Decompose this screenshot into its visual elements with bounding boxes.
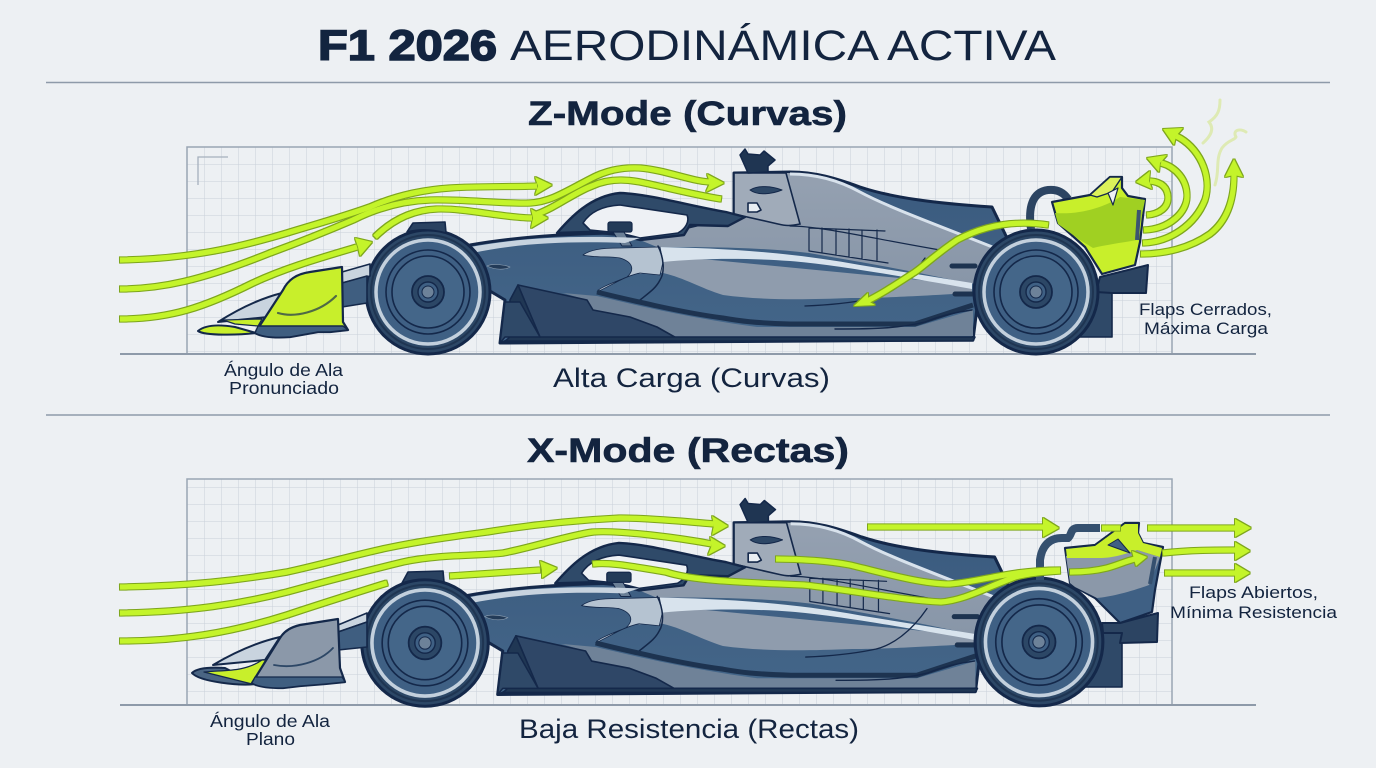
nose (213, 637, 280, 665)
flow to airbox (537, 180, 721, 214)
beam wing (1102, 613, 1158, 643)
title (318, 22, 1056, 70)
upper flow (120, 177, 552, 260)
title: F1 2026 (318, 22, 497, 70)
caption: Alta Carga: Alta Carga (Curvas) (553, 363, 830, 393)
label: front wing Z (224, 360, 343, 398)
heading: X-Mode: X-Mode (Rectas) (527, 432, 849, 470)
label: front wing X: Ángulo de Ala (210, 711, 330, 731)
rear wing outflow 4 (1141, 159, 1243, 254)
airflow arrows: Z-Mode (120, 128, 1243, 319)
lower flow (120, 238, 372, 319)
label: front wing Z: Ángulo de Ala (224, 360, 343, 380)
title: AERODINÁMICA ACTIVA (510, 22, 1056, 70)
rear wing outflow 3 (1143, 128, 1207, 243)
label: front wing X (210, 711, 330, 749)
rear wing, lime (1052, 177, 1145, 274)
front wing endplate, lime (255, 267, 348, 337)
label: rear wing Z: Máxima Carga (1144, 319, 1269, 338)
front wheel fender (407, 222, 446, 233)
heading: Z-Mode: Z-Mode (Curvas) (528, 95, 847, 133)
flow through wing slot (1102, 525, 1120, 531)
lime open flap (1066, 524, 1162, 558)
rear wheel (975, 578, 1103, 706)
wind tunnel grid (120, 147, 1256, 354)
front wing endplate, grey (252, 619, 345, 688)
rear wing main plane (1065, 523, 1163, 623)
turbulent wisps (1203, 100, 1246, 185)
panel: Z-Mode car diagram (120, 100, 1256, 354)
label: rear wing X: Mínima Resistencia (1170, 603, 1338, 622)
flow through car 2 (776, 559, 1060, 584)
front wheel fender (402, 571, 444, 583)
outflow 3 (1165, 564, 1250, 582)
label: rear wing Z (1139, 300, 1272, 338)
rear wing swan neck (1040, 528, 1100, 580)
middle flow (120, 532, 725, 613)
front wheel (362, 580, 488, 706)
rear bodywork (1085, 633, 1122, 687)
grey panel (1066, 550, 1160, 598)
rear wing outflow 2 (1144, 155, 1187, 230)
panel: X-Mode car diagram (120, 479, 1256, 706)
rear bodywork (1080, 285, 1112, 337)
rear wing swan neck (1030, 190, 1068, 229)
label: rear wing X: Flaps Abiertos, (1189, 583, 1318, 602)
outflow 2 (1163, 542, 1250, 560)
upper flow (120, 516, 728, 587)
rear wheel (974, 230, 1098, 354)
flow through car 1 (593, 563, 1060, 602)
rear wing outflow 1 (1136, 171, 1168, 215)
downwash arrow (854, 223, 1048, 306)
middle flow (120, 168, 724, 289)
label: front wing X: Plano (246, 729, 295, 749)
car body (192, 498, 1163, 706)
flow over wheel (375, 209, 548, 237)
caption: Baja Resistencia: Baja Resistencia (Rectas) (519, 714, 859, 744)
flow through wing (1070, 551, 1147, 572)
label: front wing Z: Pronunciado (229, 378, 339, 398)
front wing tip (192, 668, 256, 685)
flow above engine cover (868, 518, 1059, 537)
outflow 1 (1148, 519, 1251, 537)
nose (218, 293, 282, 322)
front wheel (366, 230, 490, 354)
car body (198, 149, 1148, 354)
label: rear wing Z: Flaps Cerrados, (1139, 300, 1272, 319)
label: rear wing X (1170, 583, 1338, 622)
lower flow (120, 583, 387, 641)
front wing tip (198, 325, 256, 335)
airflow arrows: X-Mode (120, 516, 1251, 641)
flow past fender (450, 561, 557, 578)
wind tunnel grid (120, 479, 1256, 705)
beam wing (1096, 265, 1148, 293)
